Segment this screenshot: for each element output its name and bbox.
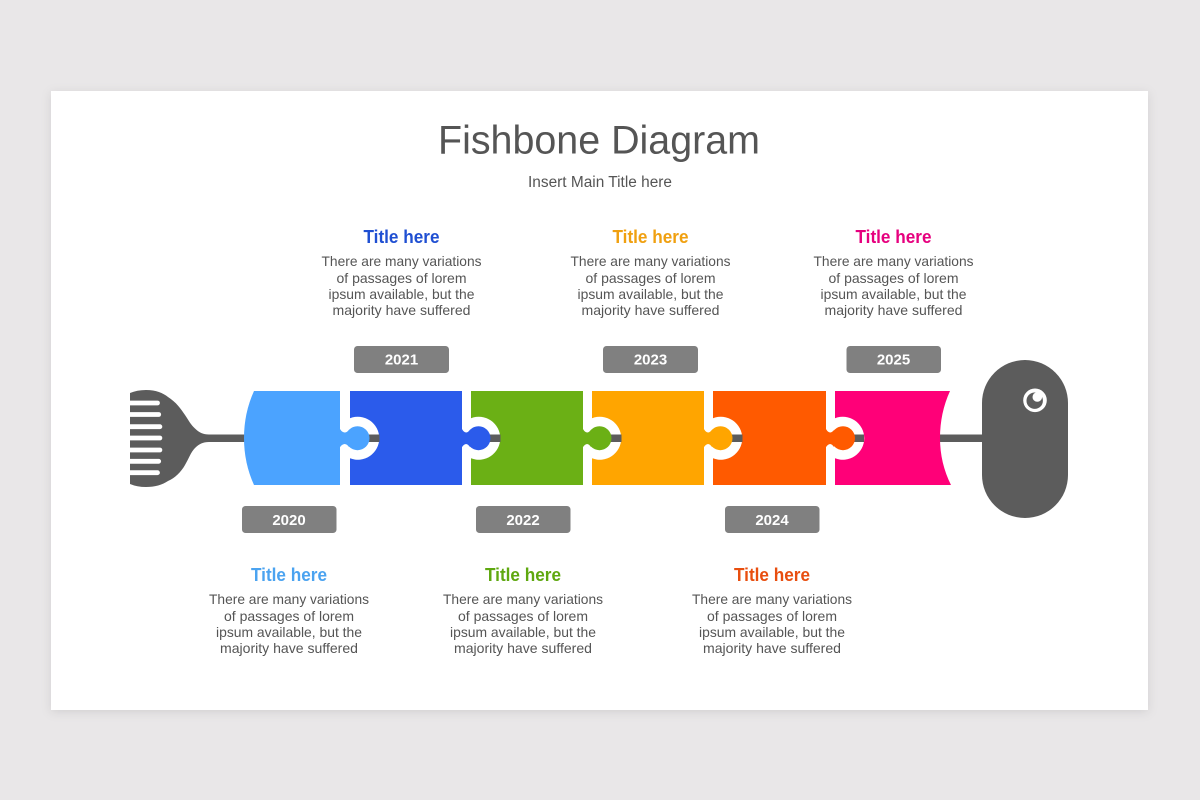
puzzle piece 2020: [244, 391, 340, 485]
text block 2024: of passages of lorem: [707, 608, 837, 624]
text block 2020: There are many variations: [209, 591, 369, 607]
text block 2025: There are many variations: [814, 253, 974, 269]
puzzle piece 2025: [825, 391, 951, 485]
text block 2024: [692, 565, 852, 656]
puzzle piece 2024: [703, 391, 826, 485]
text block 2023: There are many variations: [570, 253, 730, 269]
text block 2024: Title here: [734, 565, 810, 585]
text block 2023: [570, 227, 730, 318]
subtitle: Insert Main Title here: [528, 174, 672, 191]
text block 2021: There are many variations: [322, 253, 482, 269]
text block 2025: Title here: [856, 227, 932, 247]
year badge 2021: 2021: [385, 352, 418, 368]
fish spine: [205, 434, 985, 442]
text block 2022: ipsum available, but the: [450, 624, 596, 640]
title: Fishbone Diagram: [438, 118, 760, 162]
text block 2020: Title here: [251, 565, 327, 585]
text block 2022: majority have suffered: [454, 640, 592, 656]
text block 2021: [322, 227, 482, 318]
year badge 2022: [476, 506, 570, 533]
year badge 2025: 2025: [877, 352, 910, 368]
text block 2020: of passages of lorem: [224, 608, 354, 624]
puzzle piece 2021: [339, 391, 462, 485]
text block 2025: of passages of lorem: [828, 270, 958, 286]
text block 2020: majority have suffered: [220, 640, 358, 656]
puzzle piece 2023: [582, 391, 704, 485]
year badge 2020: [242, 506, 336, 533]
year badge 2025: [846, 346, 941, 373]
year badge 2022: 2022: [506, 512, 540, 529]
text block 2022: [443, 565, 603, 656]
text block 2022: There are many variations: [443, 591, 603, 607]
text block 2023: majority have suffered: [582, 302, 720, 318]
text block 2022: Title here: [485, 565, 561, 585]
puzzle piece 2022: [461, 391, 583, 485]
text block 2024: majority have suffered: [703, 640, 841, 656]
text block 2024: ipsum available, but the: [699, 624, 845, 640]
text block 2021: majority have suffered: [332, 302, 470, 318]
text block 2021: Title here: [364, 227, 440, 247]
icon: fish head: [982, 360, 1068, 518]
text block 2021: ipsum available, but the: [328, 286, 475, 302]
text block 2024: There are many variations: [692, 591, 852, 607]
text block 2023: of passages of lorem: [586, 270, 716, 286]
year badge 2024: [725, 506, 820, 533]
panel: white slide: [51, 91, 1148, 710]
year badge 2023: 2023: [634, 352, 667, 368]
text block 2020: [209, 565, 369, 656]
text block 2022: of passages of lorem: [458, 608, 588, 624]
icon: fish tail: [130, 390, 246, 487]
year badge 2021: [354, 346, 449, 373]
text block 2023: Title here: [612, 227, 688, 247]
text block 2025: ipsum available, but the: [820, 286, 967, 302]
text block 2025: [814, 227, 974, 318]
text block 2023: ipsum available, but the: [578, 286, 724, 302]
text block 2025: majority have suffered: [824, 302, 962, 318]
year badge 2024: 2024: [755, 512, 789, 529]
text block 2021: of passages of lorem: [336, 270, 466, 286]
year badge 2020: 2020: [272, 512, 306, 529]
year badge 2023: [603, 346, 698, 373]
text block 2020: ipsum available, but the: [216, 624, 362, 640]
